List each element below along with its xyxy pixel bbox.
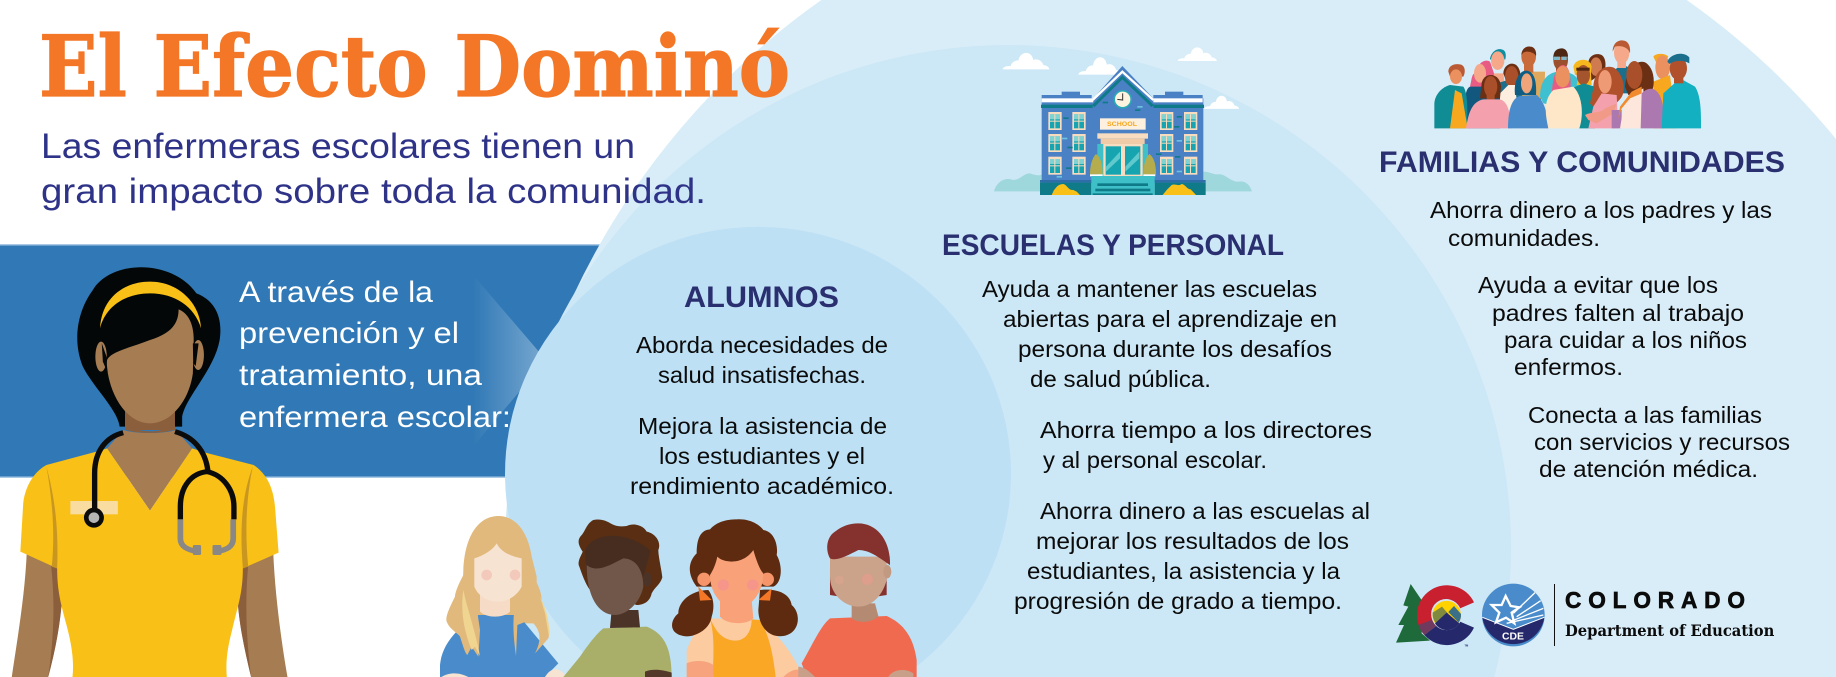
logo: Colorado Department of Education	[1396, 584, 1775, 647]
subtitle: Las enfermeras escolares tienen un	[41, 127, 635, 166]
text block: nurse intro: prevención y el	[239, 317, 459, 350]
text block: familias y comunidades: Conecta a las familias	[1528, 402, 1762, 428]
text block: escuelas y personal: de salud pública.	[1030, 366, 1211, 392]
text block: nurse intro	[239, 276, 511, 434]
icon: school building	[994, 47, 1252, 195]
heading: escuelas y personal: ESCUELAS Y PERSONAL	[942, 229, 1284, 262]
blue band	[0, 244, 620, 478]
icon: CDE star badge	[1482, 584, 1545, 646]
arrow: chevron on band	[460, 262, 546, 462]
icon: clouds	[1003, 47, 1239, 109]
text block: familias y comunidades: para cuidar a los niños	[1504, 327, 1747, 353]
text block: alumnos: salud insatisfechas.	[658, 362, 866, 388]
text block: familias y comunidades: con servicios y recursos	[1534, 429, 1790, 455]
text block: familias y comunidades: Ayuda a evitar que los	[1478, 272, 1718, 298]
text block: alumnos: Mejora la asistencia de	[638, 413, 887, 439]
heading: familias y comunidades: FAMILIAS Y COMUNIDADES	[1379, 146, 1785, 179]
student: boy with curly hair	[563, 519, 672, 677]
text block: familias y comunidades: Ahorra dinero a los padres y las	[1430, 197, 1772, 223]
student: blonde girl	[440, 516, 567, 677]
icon: crowd of people	[1434, 40, 1701, 128]
text block: escuelas y personal: mejorar los resultados de los	[1036, 528, 1349, 554]
text block: nurse intro: A través de la	[239, 276, 433, 309]
subtitle: gran impacto sobre toda la comunidad.	[41, 172, 706, 211]
text block: escuelas y personal: estudiantes, la asistencia y la	[1027, 558, 1340, 584]
text block: escuelas y personal: Ahorra tiempo a los directores	[1040, 417, 1372, 443]
icon: colorado C logo	[1396, 584, 1474, 647]
student: girl with pigtails	[672, 519, 807, 677]
text block: alumnos: rendimiento académico.	[630, 473, 894, 499]
text block: alumnos: los estudiantes y el	[659, 443, 865, 469]
text block: familias y comunidades: padres falten al trabajo	[1492, 300, 1744, 326]
text block: escuelas y personal: progresión de grado a tiempo.	[1014, 588, 1342, 614]
icon: school nurse	[12, 267, 287, 677]
text block: familias y comunidades: comunidades.	[1448, 225, 1600, 251]
text block: familias y comunidades: de atención médica.	[1539, 456, 1758, 482]
icon: four students	[440, 516, 917, 677]
text block: alumnos: Aborda necesidades de	[636, 332, 888, 358]
text block: escuelas y personal: abiertas para el aprendizaje en	[1003, 306, 1337, 332]
text block: escuelas y personal: y al personal escolar.	[1043, 447, 1267, 473]
icon: school building: SCHOOL	[1107, 121, 1137, 128]
panel: alumnos circle	[505, 227, 1011, 677]
heading: alumnos: ALUMNOS	[684, 281, 839, 314]
text block: escuelas y personal: Ayuda a mantener las escuelas	[982, 276, 1317, 302]
subtitle	[41, 127, 706, 211]
text block: nurse intro: tratamiento, una	[239, 359, 482, 392]
text block: alumnos	[630, 332, 894, 499]
text block: escuelas y personal: Ahorra dinero a las escuelas al	[1040, 498, 1370, 524]
text block: nurse intro: enfermera escolar:	[239, 401, 511, 434]
student: child with red hair	[798, 523, 917, 677]
logo: Colorado Department of Education: COLORADO	[1565, 587, 1745, 613]
icon: CDE star badge: CDE	[1502, 631, 1524, 642]
text block: familias y comunidades: enfermos.	[1514, 354, 1623, 380]
icon: colorado C logo: TM	[1464, 643, 1469, 647]
text block: escuelas y personal	[982, 276, 1372, 614]
text block: escuelas y personal: persona durante los desafíos	[1018, 336, 1332, 362]
logo: Colorado Department of Education: Department of Education	[1565, 621, 1775, 640]
panel: escuelas y personal circle	[505, 45, 1511, 677]
text block: familias y comunidades	[1430, 197, 1790, 482]
panel: familias y comunidades circle	[502, 0, 1836, 677]
title: El Efecto Dominó	[39, 17, 790, 116]
